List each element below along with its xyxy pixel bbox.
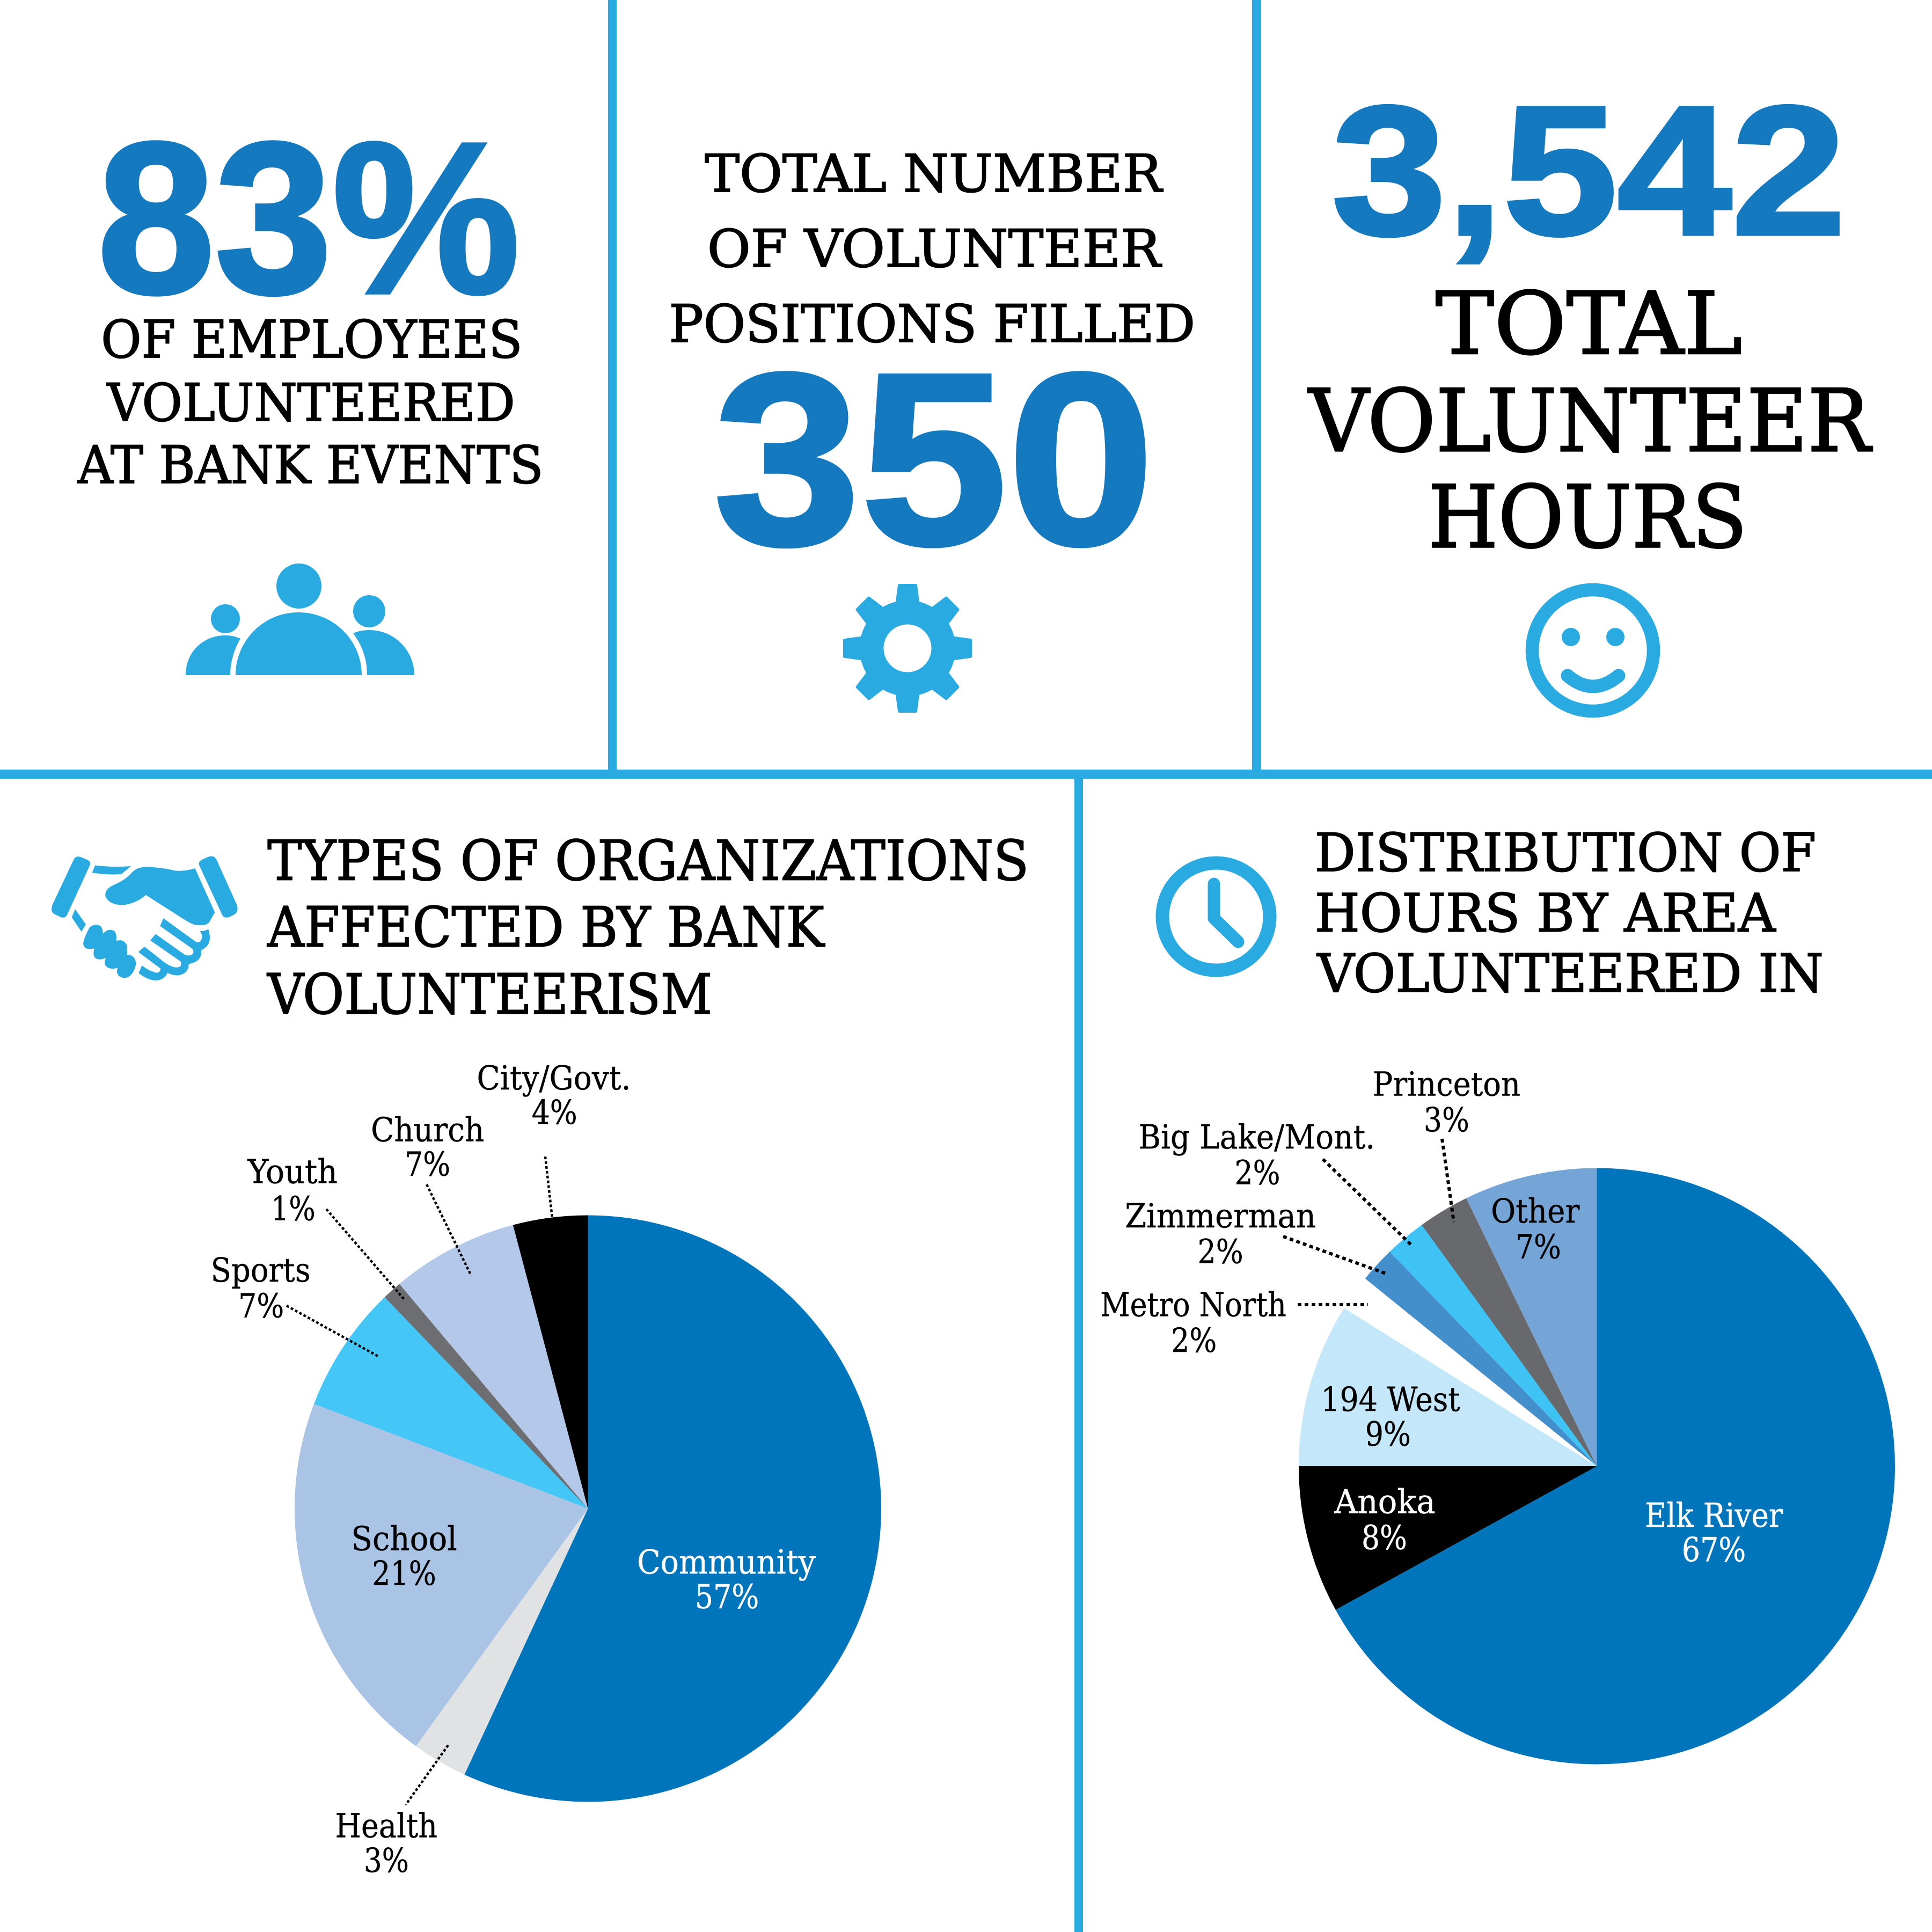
slice: health xyxy=(416,1509,588,1775)
labels: organizations pie: School xyxy=(351,1519,457,1558)
slice: zimmerman xyxy=(1365,1252,1597,1466)
text: total volunteer hours: TOTAL xyxy=(1436,274,1742,374)
text: total number of volunteer positions filled: POSITIONS FILLED xyxy=(669,294,1195,354)
heading: types of organizations: VOLUNTEERISM xyxy=(266,962,712,1027)
labels: organizations pie: Youth xyxy=(247,1152,338,1191)
labels: areas pie xyxy=(1100,1064,1783,1569)
labels: areas pie: 67% xyxy=(1682,1530,1746,1569)
heading: distribution of hours: HOURS BY AREA xyxy=(1315,883,1776,945)
labels: organizations pie xyxy=(211,1058,816,1880)
labels: areas pie: Zimmerman xyxy=(1125,1196,1316,1235)
slice: big lake xyxy=(1390,1225,1597,1466)
labels: organizations pie: Community xyxy=(637,1542,816,1582)
heading: types of organizations: AFFECTED BY BANK xyxy=(267,895,825,960)
slice: elk river xyxy=(1336,1168,1895,1765)
stat: 3,542: 3,542 xyxy=(1332,68,1846,273)
heading: types of organizations: TYPES OF ORGANIZATIONS xyxy=(267,829,1029,893)
slice: youth xyxy=(385,1284,588,1509)
panel: distribution of hours xyxy=(1100,822,1895,1765)
labels: organizations pie: 4% xyxy=(532,1093,577,1132)
panel: total volunteer hours xyxy=(1307,68,1872,711)
labels: areas pie: Princeton xyxy=(1373,1064,1520,1103)
labels: areas pie: Big Lake/Mont. xyxy=(1138,1117,1375,1157)
text: total volunteer hours xyxy=(1307,274,1872,567)
panel: volunteer positions filled xyxy=(669,144,1195,711)
heading: distribution of hours: DISTRIBUTION OF xyxy=(1315,822,1816,884)
pie chart: areas xyxy=(1299,1168,1895,1765)
labels: areas pie: 8% xyxy=(1362,1518,1407,1557)
labels: organizations pie: 7% xyxy=(405,1145,450,1184)
labels: areas pie: 7% xyxy=(1516,1227,1561,1266)
icon: gear xyxy=(845,586,970,711)
text: of employees volunteered at bank events: AT BANK EVENTS xyxy=(77,435,544,495)
icon: people xyxy=(186,564,414,675)
text: of employees volunteered at bank events xyxy=(77,310,544,495)
labels: organizations pie: 21% xyxy=(372,1554,436,1593)
slice: city/govt xyxy=(513,1215,588,1509)
slice: sports xyxy=(314,1297,588,1509)
slice: anoka xyxy=(1299,1466,1597,1610)
heading: distribution of hours: VOLUNTEERED IN xyxy=(1316,943,1824,1005)
text: of employees volunteered at bank events: OF EMPLOYEES xyxy=(101,310,522,370)
slice: 194 west xyxy=(1299,1308,1597,1466)
slice: community xyxy=(464,1215,881,1802)
labels: organizations pie: 57% xyxy=(695,1577,759,1616)
labels: organizations pie: 7% xyxy=(238,1286,284,1326)
labels: areas pie: 2% xyxy=(1171,1321,1217,1360)
text: total number of volunteer positions filled: TOTAL NUMBER xyxy=(705,144,1163,204)
slice: school xyxy=(295,1404,588,1746)
labels: areas pie: 9% xyxy=(1365,1414,1411,1453)
slice: princeton xyxy=(1422,1198,1597,1466)
labels: organizations pie: Church xyxy=(371,1110,484,1149)
text: total number of volunteer positions filled: OF VOLUNTEER xyxy=(707,219,1162,279)
pie chart: organizations xyxy=(295,1215,881,1802)
labels: areas pie: 194 West xyxy=(1321,1380,1460,1419)
labels: areas pie: 2% xyxy=(1235,1153,1280,1192)
labels: organizations pie: 1% xyxy=(271,1189,316,1228)
icon: clock xyxy=(1162,863,1270,970)
labels: areas pie: 3% xyxy=(1424,1100,1469,1139)
icon: smiley face xyxy=(1532,590,1653,711)
labels: organizations pie: Sports xyxy=(211,1250,311,1290)
panel: types of organizations xyxy=(52,829,1029,1880)
leader lines: organizations xyxy=(287,1157,552,1805)
icon: handshake xyxy=(52,856,238,980)
text: total number of volunteer positions filled xyxy=(669,144,1195,354)
panel: 83% of employees xyxy=(77,98,544,675)
slice: church xyxy=(399,1225,588,1509)
heading: distribution of hours xyxy=(1315,822,1824,1005)
labels: areas pie: Elk River xyxy=(1645,1496,1783,1535)
labels: organizations pie: 3% xyxy=(364,1841,409,1880)
slice: other xyxy=(1466,1168,1597,1466)
leader lines: areas xyxy=(1283,1139,1454,1305)
stat: 350: 350 xyxy=(713,322,1154,596)
heading: types of organizations xyxy=(266,829,1029,1027)
stat: 83%: 83% xyxy=(97,98,520,339)
labels: organizations pie: Health xyxy=(335,1806,437,1846)
text: total volunteer hours: HOURS xyxy=(1428,467,1747,567)
labels: areas pie: 2% xyxy=(1198,1232,1243,1271)
labels: areas pie: Other xyxy=(1491,1191,1580,1231)
labels: organizations pie: City/Govt. xyxy=(477,1058,631,1097)
text: of employees volunteered at bank events: VOLUNTEERED xyxy=(107,373,515,433)
text: total volunteer hours: VOLUNTEER xyxy=(1307,371,1872,471)
labels: areas pie: Anoka xyxy=(1334,1482,1436,1521)
labels: areas pie: Metro North xyxy=(1100,1285,1286,1324)
